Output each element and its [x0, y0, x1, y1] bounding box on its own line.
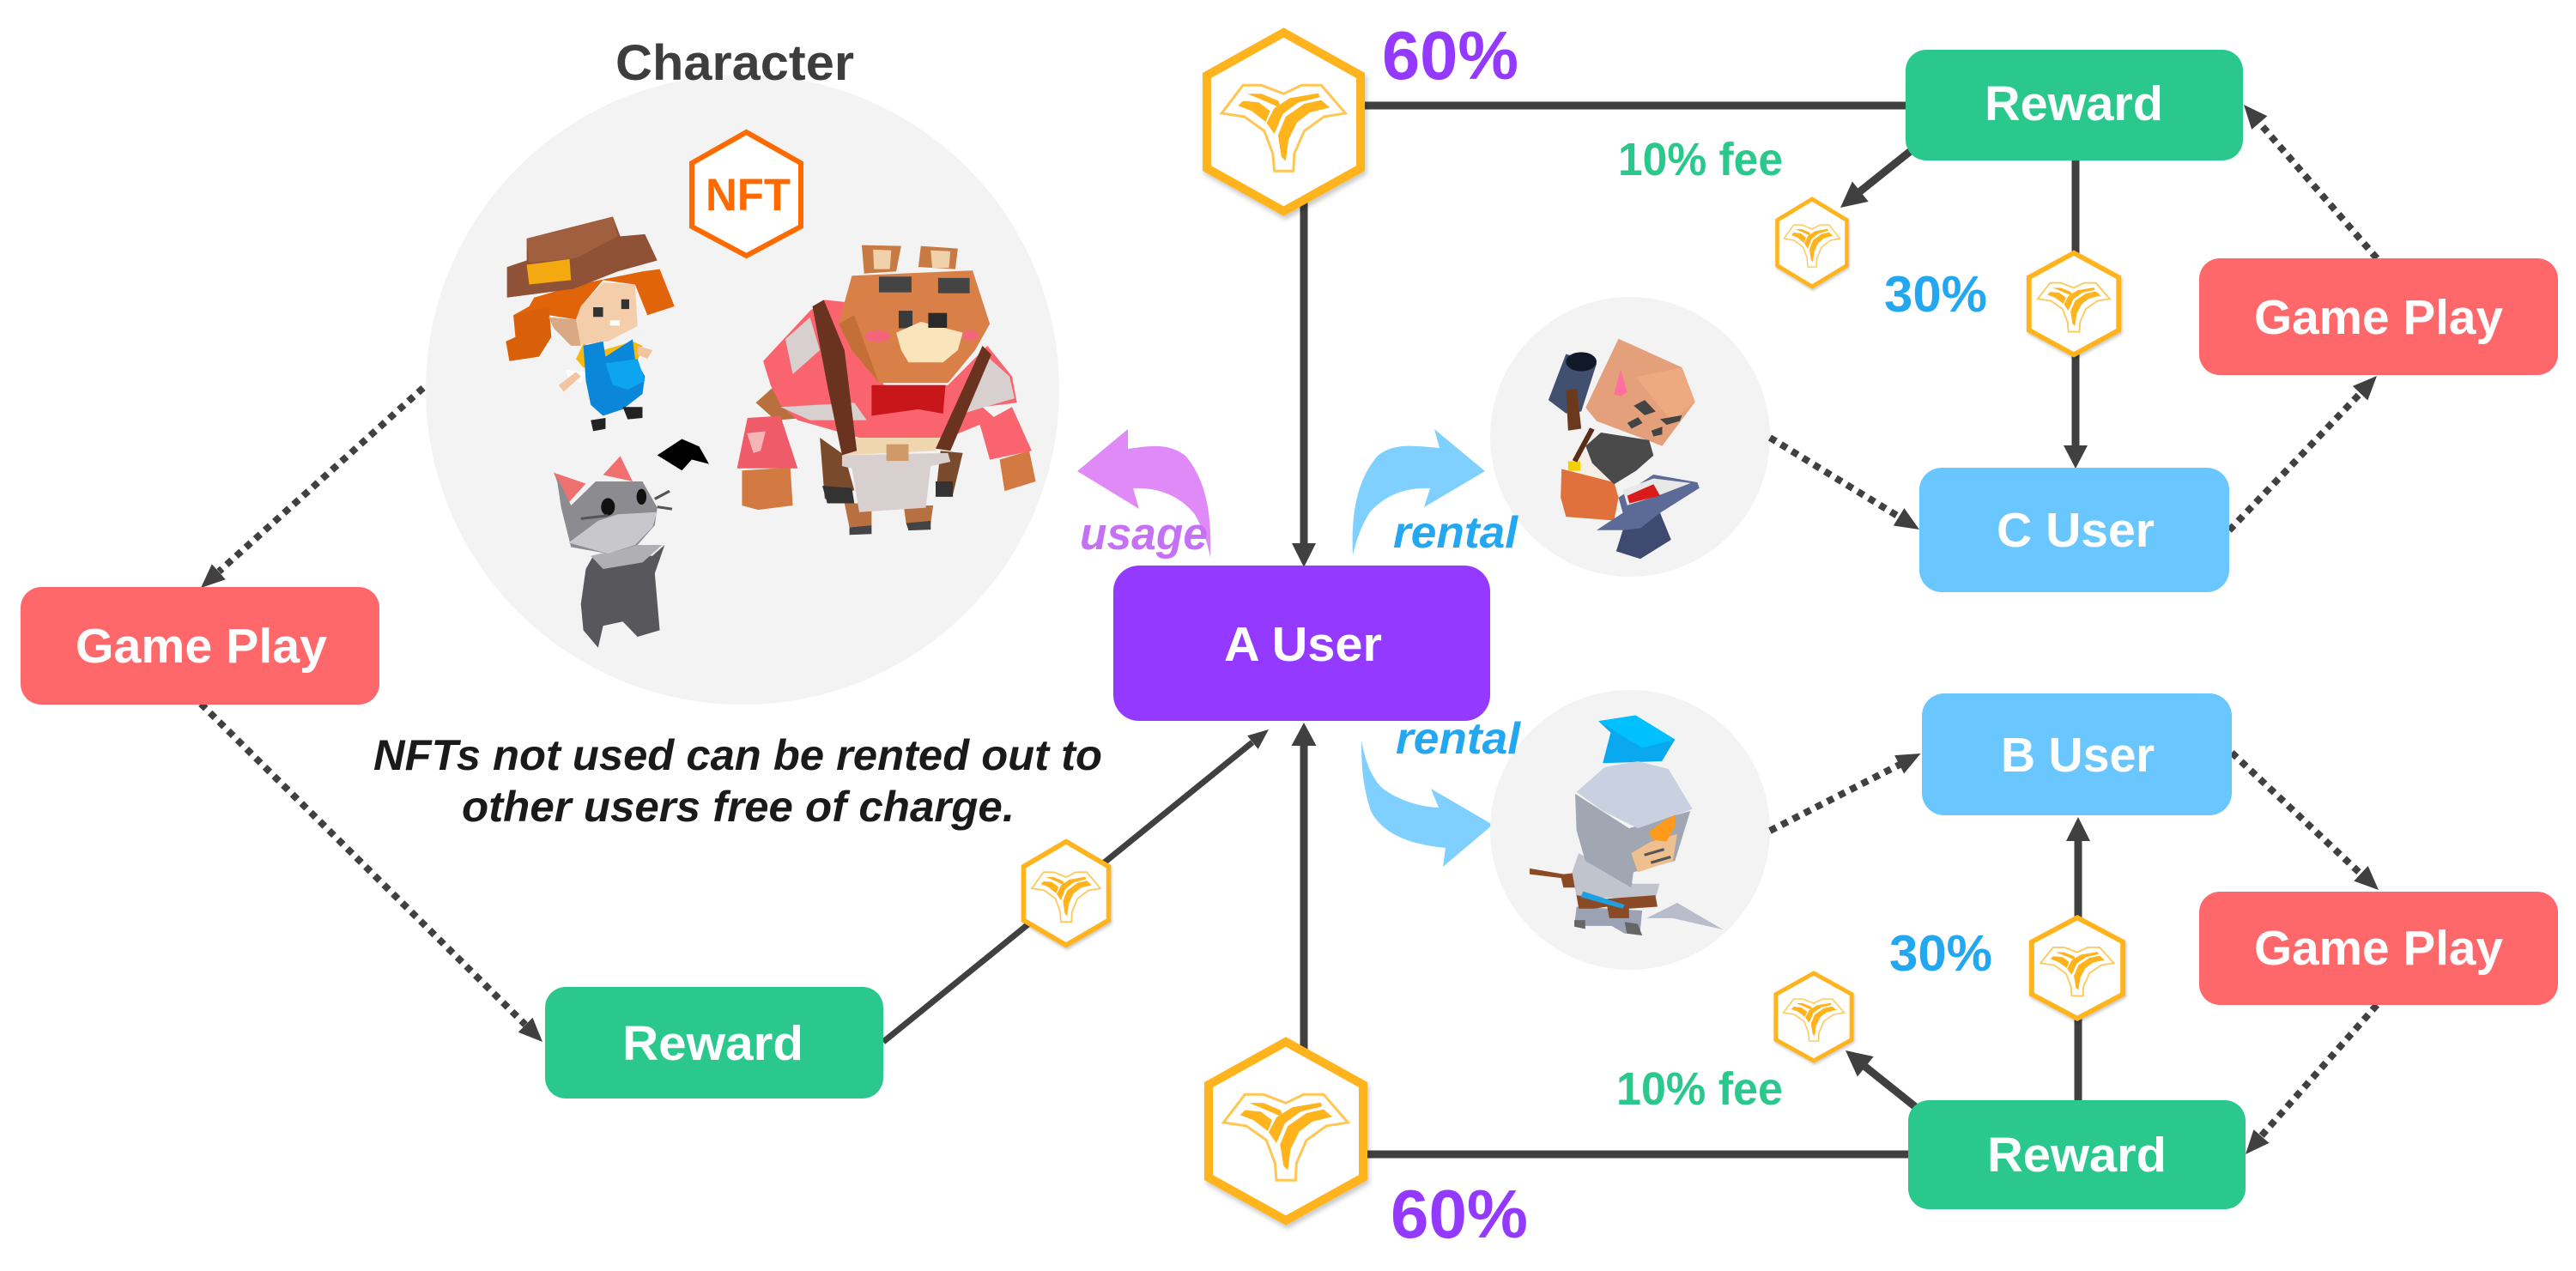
arrow: B user to game play (dotted)	[2232, 753, 2379, 890]
arrow: knight to B user (dotted)	[1770, 754, 1921, 831]
icon: farmer girl character	[506, 216, 675, 431]
box: C User: C User	[1997, 503, 2155, 558]
arrow: bottom token to A user	[1291, 723, 1317, 1051]
icon: token on left reward arrow	[1023, 842, 1109, 945]
icon: top fee token	[1777, 199, 1847, 287]
icon: black flag	[658, 439, 709, 470]
box: top Game Play: Game Play	[2254, 290, 2503, 345]
arrow: top reward down to C user	[2064, 160, 2088, 469]
arrow: rental to knight (light blue)	[1361, 741, 1493, 867]
box: left Game Play: Game Play	[76, 619, 327, 674]
arrow: left game play to left reward (dotted)	[201, 704, 542, 1042]
arrow: usage to character (pink)	[1077, 429, 1210, 558]
arrow: top reward to fee token	[1840, 150, 1912, 208]
arrow: top token to A user	[1292, 202, 1316, 567]
box: bottom Game Play	[2199, 892, 2558, 1005]
label: 30% (top): 30%	[1884, 266, 1987, 323]
box: top Reward	[1906, 50, 2243, 160]
box: top Game Play	[2199, 258, 2558, 375]
arrow: game play to bottom reward (dotted)	[2246, 1005, 2377, 1154]
label: 10% fee (bottom): 10% fee	[1616, 1063, 1783, 1115]
arrow: C user to game play (dotted)	[2229, 376, 2377, 530]
icon: top 30% token	[2029, 253, 2118, 354]
arrow: rental to blacksmith (light blue)	[1353, 429, 1485, 555]
heading: Character: Character	[615, 35, 854, 91]
arrow: bottom reward up to B user	[2066, 817, 2090, 1100]
box: A User	[1113, 566, 1490, 721]
text block: NFT rental note: other users free of charge.	[462, 783, 1015, 831]
label: 30% (bottom): 30%	[1889, 925, 1992, 982]
label: usage: usage	[1080, 509, 1208, 560]
box: bottom Reward: Reward	[1987, 1128, 2167, 1183]
box: left Reward	[545, 987, 883, 1099]
box: C User	[1919, 468, 2229, 592]
arrow: bottom reward to fee token	[1846, 1050, 1917, 1108]
panel: knight character circle	[1490, 690, 1770, 970]
arrow: game play to top reward (dotted)	[2244, 105, 2377, 258]
icon: knight character	[1530, 716, 1723, 935]
panel: character circle	[426, 75, 1059, 705]
icon: bear character	[737, 245, 1036, 535]
icon: top large token	[1207, 33, 1361, 211]
label: 10% fee (top): 10% fee	[1618, 134, 1783, 185]
arrow: character to left game play (dotted)	[201, 388, 423, 588]
panel: blacksmith character circle	[1490, 297, 1770, 577]
label: rental (top): rental	[1393, 508, 1519, 558]
text block: NFT rental note: NFTs not used can be rented out to	[373, 731, 1102, 779]
box: B User	[1922, 693, 2232, 815]
icon: bottom 30% token	[2032, 917, 2123, 1019]
arrow: blacksmith to C user (dotted)	[1770, 438, 1919, 530]
box: left Game Play	[21, 587, 379, 705]
connector: bottom reward to bottom token	[1367, 1150, 1910, 1159]
icon: bottom fee token	[1776, 973, 1852, 1061]
box: A User: A User	[1224, 617, 1382, 672]
icon: blacksmith character	[1549, 339, 1700, 559]
box: B User: B User	[2001, 728, 2155, 783]
connector: top reward to top token	[1365, 101, 1907, 110]
label: 60% (top): 60%	[1382, 17, 1518, 94]
box: bottom Reward	[1908, 1100, 2246, 1209]
box: top Reward: Reward	[1985, 76, 2163, 131]
box: left Reward: Reward	[622, 1016, 803, 1071]
icon: NFT hexagon badge	[692, 132, 801, 256]
box: bottom Game Play: Game Play	[2254, 921, 2503, 976]
label: rental (bottom): rental	[1396, 714, 1522, 764]
arrow: left reward to A user	[883, 729, 1269, 1042]
text block: NFT rental note	[373, 731, 1102, 831]
icon: grey cat character	[554, 456, 672, 648]
icon: NFT hexagon badge: NFT	[706, 170, 791, 221]
icon: bottom large token	[1209, 1042, 1363, 1220]
label: 60% (bottom): 60%	[1391, 1176, 1528, 1252]
